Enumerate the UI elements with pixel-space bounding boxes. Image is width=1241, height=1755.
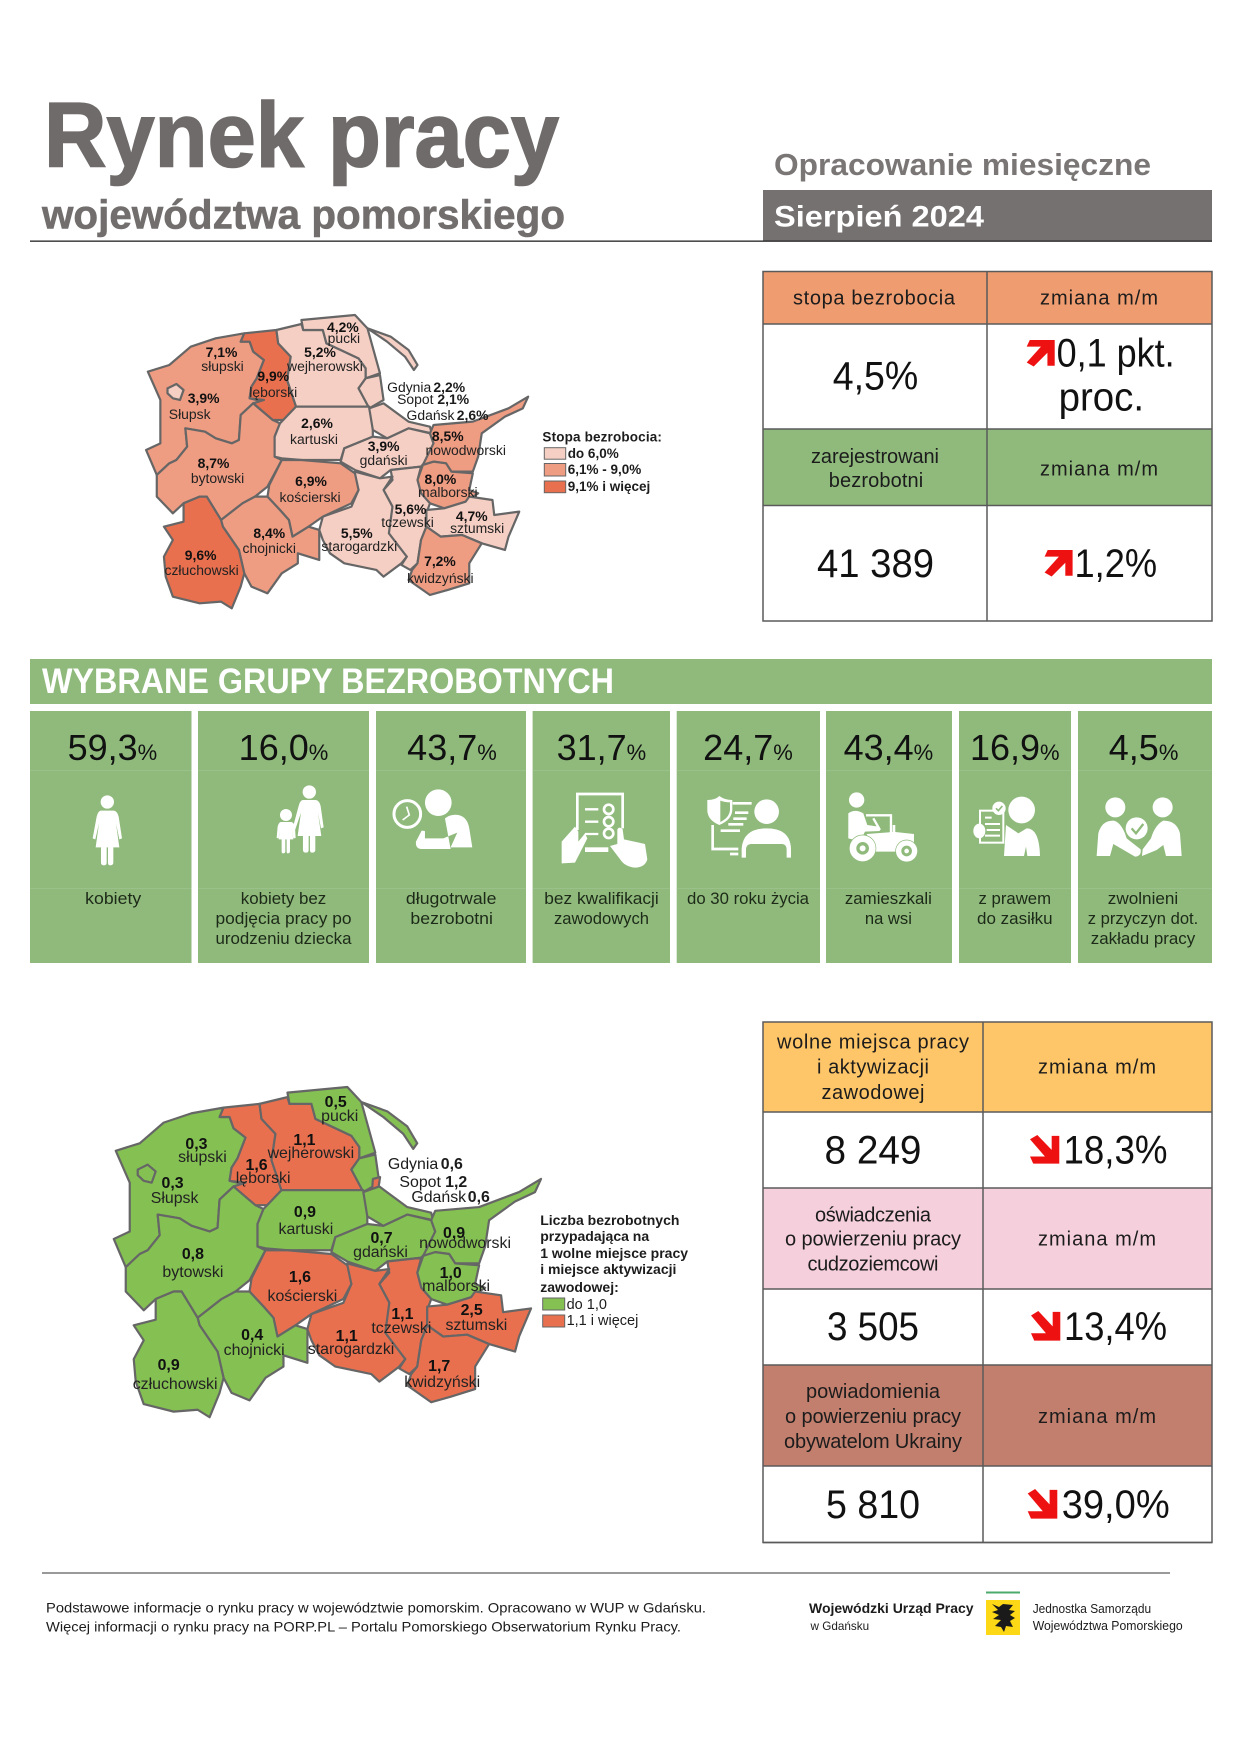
map shapes <box>114 1087 541 1417</box>
map labels: 9,9% <box>257 368 290 384</box>
map labels: tczewski <box>371 1320 431 1337</box>
map labels: malborski <box>418 484 478 500</box>
card: kobiety bez podjęcia pracy: urodzeniu dziecka <box>216 930 352 948</box>
map labels: wejherowski <box>286 358 363 374</box>
arrow up <box>1045 550 1073 576</box>
header <box>30 84 1212 242</box>
map labels: kościerski <box>279 489 341 505</box>
map labels: lęborski <box>236 1170 291 1187</box>
declarations header: oświadczenia <box>815 1204 932 1226</box>
map labels: nowodworski <box>425 442 506 458</box>
footer note: Podstawowe informacje o rynku pracy w województwie pomorskim. Opracowano w WUP w Gdańsku. <box>46 1600 706 1616</box>
section band <box>30 659 1212 704</box>
rate change value: 0,1 pkt. <box>1057 332 1175 376</box>
title: Rynek pracy <box>44 84 559 186</box>
card: długotrwale bezrobotni: bezrobotni <box>410 910 493 928</box>
icon: handshake with check <box>1097 797 1182 857</box>
map labels: 0,9 <box>443 1225 465 1242</box>
registered header: zarejestrowani <box>811 446 939 468</box>
icon: person with clock <box>394 789 472 849</box>
map labels: malborski <box>422 1278 490 1295</box>
card: zamieszkali na wsi: 43,4% <box>844 727 933 768</box>
map labels: 5,6% <box>395 501 427 517</box>
map labels: 0,9 <box>158 1357 180 1374</box>
declarations value: 3 505 <box>827 1305 919 1349</box>
table: job offers: o powierzeniu pracy <box>785 1406 961 1428</box>
table: job offers: zmiana m/m <box>1038 1229 1156 1251</box>
map legend: i miejsce aktywizacji <box>540 1261 676 1277</box>
map labels: nowodworski <box>419 1235 511 1252</box>
table: job offers: zmiana m/m <box>1038 1406 1156 1428</box>
arrow up <box>1027 340 1055 366</box>
map labels: Sopot <box>399 1174 442 1191</box>
icon: farmer on tractor <box>848 792 918 862</box>
map labels: 0,5 <box>325 1094 347 1111</box>
logo: WUP: w Gdańsku <box>810 1619 869 1633</box>
card: długotrwale bezrobotni: 43,7% <box>407 727 497 768</box>
cards: selected groups <box>30 711 1212 963</box>
map labels: 6,9% <box>295 473 327 489</box>
map legend: do 6,0% <box>568 446 619 461</box>
table: job offers: zmiana m/m <box>1038 1056 1156 1078</box>
footer <box>42 1572 1183 1635</box>
map labels: chojnicki <box>224 1342 285 1359</box>
map labels: bytowski <box>191 470 244 486</box>
map legend: zawodowej: <box>540 1279 619 1295</box>
map labels: Słupsk <box>169 406 211 422</box>
map labels: 7,2% <box>424 553 456 569</box>
card: zwolnieni z przyczyn <box>1078 711 1212 963</box>
card: kobiety <box>30 711 192 963</box>
map labels: 0,7 <box>370 1230 393 1247</box>
icon: woman with child <box>277 785 324 853</box>
arrow down <box>1028 1489 1057 1519</box>
map labels: 9,6% <box>185 547 217 563</box>
card: długotrwale bezrobotni: długotrwale <box>406 890 496 908</box>
logo: WUP <box>809 1600 974 1633</box>
table: job offers: obywatelom Ukrainy <box>784 1431 962 1453</box>
declarations change: 13,4% <box>1064 1305 1167 1349</box>
map labels: 8,7% <box>198 455 230 471</box>
card: bez kwalifikacji: bez kwalifikacji <box>544 890 659 908</box>
notifications value: 5 810 <box>826 1483 920 1527</box>
map legend <box>542 430 662 494</box>
table: unemployment: proc. <box>1059 376 1144 420</box>
choropleth map: unemployment rate <box>146 315 662 608</box>
map labels: 2,5 <box>461 1302 483 1319</box>
map labels: 0,3 <box>162 1175 184 1192</box>
map labels: lęborski <box>249 384 297 400</box>
map labels: Gdańsk <box>407 407 455 423</box>
arrow down <box>1030 1135 1059 1164</box>
unemployment rate value: 4,5% <box>833 354 918 398</box>
card: kobiety: kobiety <box>85 890 142 908</box>
map legend: 9,1% i więcej <box>568 479 650 494</box>
map labels: 3,9% <box>368 438 400 454</box>
map legend: przypadająca na <box>540 1228 649 1244</box>
map labels: 8,5% <box>432 428 464 444</box>
map labels: pucki <box>321 1108 358 1125</box>
map labels: 1,1 <box>391 1306 414 1323</box>
table: job offers: zawodowej <box>822 1082 924 1104</box>
map labels: 2,6% <box>457 407 489 423</box>
map labels: 2,2% <box>433 379 466 395</box>
card: z prawem do zasiłku: 16,9% <box>970 727 1060 768</box>
map labels: Słupsk <box>151 1190 198 1207</box>
map labels: słupski <box>178 1149 227 1166</box>
card: kobiety: 59,3% <box>68 727 157 768</box>
logo: griffin emblem <box>986 1592 1020 1635</box>
map shapes <box>146 315 528 608</box>
map labels: 4,7% <box>456 508 488 524</box>
card: zamieszkali na wsi <box>826 711 952 963</box>
subtitle: województwa pomorskiego <box>41 192 565 238</box>
map labels: Gdańsk <box>411 1189 466 1206</box>
map labels: 1,6 <box>289 1269 311 1286</box>
map labels: kartuski <box>279 1221 333 1238</box>
map labels: 4,2% <box>327 319 359 335</box>
map labels: 3,9% <box>188 390 220 406</box>
card: zwolnieni z przyczyn: 4,5% <box>1109 727 1178 768</box>
icon: person with document <box>973 797 1040 856</box>
card: do 30 roku życia: 24,7% <box>703 727 793 768</box>
map labels: Gdynia <box>388 1156 438 1173</box>
card: z prawem do zasiłku: do zasiłku <box>977 910 1053 928</box>
map labels: kwidzyński <box>404 1374 480 1391</box>
map labels: 0,6 <box>468 1189 490 1206</box>
map labels: Sopot <box>397 391 434 407</box>
map labels: 0,9 <box>294 1204 316 1221</box>
map labels: Gdynia <box>387 379 431 395</box>
map labels: 7,1% <box>206 344 238 360</box>
card: do 30 roku życia <box>677 711 820 963</box>
report type: Opracowanie miesięczne <box>774 147 1151 182</box>
header rule <box>30 240 763 242</box>
logo: self-government text: Województwa Pomorskiego <box>1033 1619 1183 1633</box>
table: unemployment: bezrobotni <box>829 470 923 492</box>
card: kobiety bez podjęcia pracy <box>198 711 369 963</box>
card: bez kwalifikacji: zawodowych <box>554 910 649 928</box>
logo: WUP: Wojewódzki Urząd Pracy <box>809 1600 974 1616</box>
card: zwolnieni z przyczyn: zakładu pracy <box>1091 930 1196 948</box>
map labels: 1,2 <box>445 1174 467 1191</box>
map legend: 6,1% - 9,0% <box>568 462 641 477</box>
map labels: chojnicki <box>243 540 296 556</box>
map labels: człuchowski <box>133 1376 218 1393</box>
vacancies header: wolne miejsca pracy <box>776 1032 969 1054</box>
card: zwolnieni z przyczyn: z przyczyn dot. <box>1088 910 1198 928</box>
logo: self-government text: Jednostka Samorządu <box>1033 1602 1151 1616</box>
vacancies value: 8 249 <box>824 1128 922 1172</box>
map labels: starogardzki <box>308 1341 394 1358</box>
footer note: Więcej informacji o rynku pracy na PORP.PL – Portalu Pomorskiego Obserwatorium Rynku Pracy. <box>46 1619 681 1635</box>
card: zamieszkali na wsi: na wsi <box>865 910 912 928</box>
map legend: do 1,0 <box>567 1297 607 1313</box>
card: z prawem do zasiłku: z prawem <box>979 890 1051 908</box>
icon: person at computer with shield <box>707 796 791 858</box>
icon: woman <box>93 795 122 865</box>
table: job offers: o powierzeniu pracy <box>785 1229 961 1251</box>
map labels: starogardzki <box>321 538 397 554</box>
map labels: kościerski <box>268 1288 337 1305</box>
section band: WYBRANE GRUPY BEZROBOTNYCH <box>42 662 614 701</box>
map labels: człuchowski <box>164 562 239 578</box>
registered value: 41 389 <box>817 542 934 586</box>
map legend: 1 wolne miejsce pracy <box>540 1245 688 1261</box>
map labels: kartuski <box>290 431 338 447</box>
card: długotrwale bezrobotni <box>376 711 526 963</box>
table: job offers: cudzoziemcowi <box>808 1254 938 1276</box>
map labels: pucki <box>328 330 360 346</box>
logo: self-government text <box>1033 1602 1183 1633</box>
map labels: 5,2% <box>304 344 336 360</box>
date band: Sierpień 2024 <box>774 200 984 234</box>
map labels: 2,1% <box>437 391 470 407</box>
card: bez kwalifikacji <box>533 711 670 963</box>
footer note <box>46 1600 706 1635</box>
map labels: 2,6% <box>301 415 333 431</box>
map legend: Liczba bezrobotnych <box>540 1212 679 1228</box>
map labels: 0,8 <box>182 1246 204 1263</box>
map labels: gdański <box>353 1244 408 1261</box>
card: zamieszkali na wsi: zamieszkali <box>845 890 932 908</box>
table: job offers: i aktywizacji <box>817 1056 929 1078</box>
card: bez kwalifikacji: 31,7% <box>557 727 646 768</box>
map labels: 0,3 <box>185 1136 208 1153</box>
table: job offers <box>763 1022 1212 1542</box>
table: unemployment: zmiana m/m <box>1040 459 1158 481</box>
card: kobiety bez podjęcia pracy: 16,0% <box>239 727 328 768</box>
map legend: Stopa bezrobocia: <box>542 430 662 444</box>
map labels: 1,1 <box>293 1132 316 1149</box>
card: do 30 roku życia: do 30 roku życia <box>687 890 810 908</box>
table: unemployment <box>763 272 1212 621</box>
map labels: sztumski <box>450 520 504 536</box>
choropleth map: unemployed per vacancy <box>114 1087 688 1417</box>
map labels: 1,6 <box>246 1157 268 1174</box>
card: zwolnieni z przyczyn: zwolnieni <box>1108 890 1178 908</box>
map labels: 1,0 <box>440 1265 462 1282</box>
card: kobiety bez podjęcia pracy: podjęcia pracy po <box>216 910 352 928</box>
notifications change: 39,0% <box>1062 1483 1170 1527</box>
map legend <box>540 1212 688 1329</box>
map labels: 1,7 <box>428 1358 450 1375</box>
unemployment rate header: stopa bezrobocia <box>793 288 956 310</box>
map labels: bytowski <box>162 1264 223 1281</box>
map labels: 8,0% <box>424 471 457 487</box>
map labels: kwidzyński <box>407 570 474 586</box>
notifications header: powiadomienia <box>806 1381 941 1403</box>
table: unemployment: zmiana m/m <box>1040 288 1158 310</box>
map labels <box>133 1094 511 1393</box>
icon: tablet with checklist <box>562 794 647 868</box>
map labels: 0,6 <box>441 1156 463 1173</box>
map labels: 1,1 <box>336 1328 358 1345</box>
card: z prawem do zasiłku <box>959 711 1071 963</box>
map labels: sztumski <box>445 1317 507 1334</box>
map labels: 5,5% <box>341 525 373 541</box>
card: kobiety bez podjęcia pracy: kobiety bez <box>241 890 326 908</box>
map legend: 1,1 i więcej <box>567 1313 638 1329</box>
map labels <box>164 319 506 586</box>
map labels: 0,4 <box>241 1327 263 1344</box>
vacancies change: 18,3% <box>1064 1128 1168 1172</box>
map labels: tczewski <box>381 514 434 530</box>
map labels: wejherowski <box>267 1145 354 1162</box>
registered change: 1,2% <box>1074 542 1157 586</box>
map labels: 8,4% <box>253 525 286 541</box>
arrow down <box>1031 1311 1060 1341</box>
map labels: słupski <box>201 358 244 374</box>
map labels: gdański <box>360 452 408 468</box>
date band <box>763 190 1212 242</box>
